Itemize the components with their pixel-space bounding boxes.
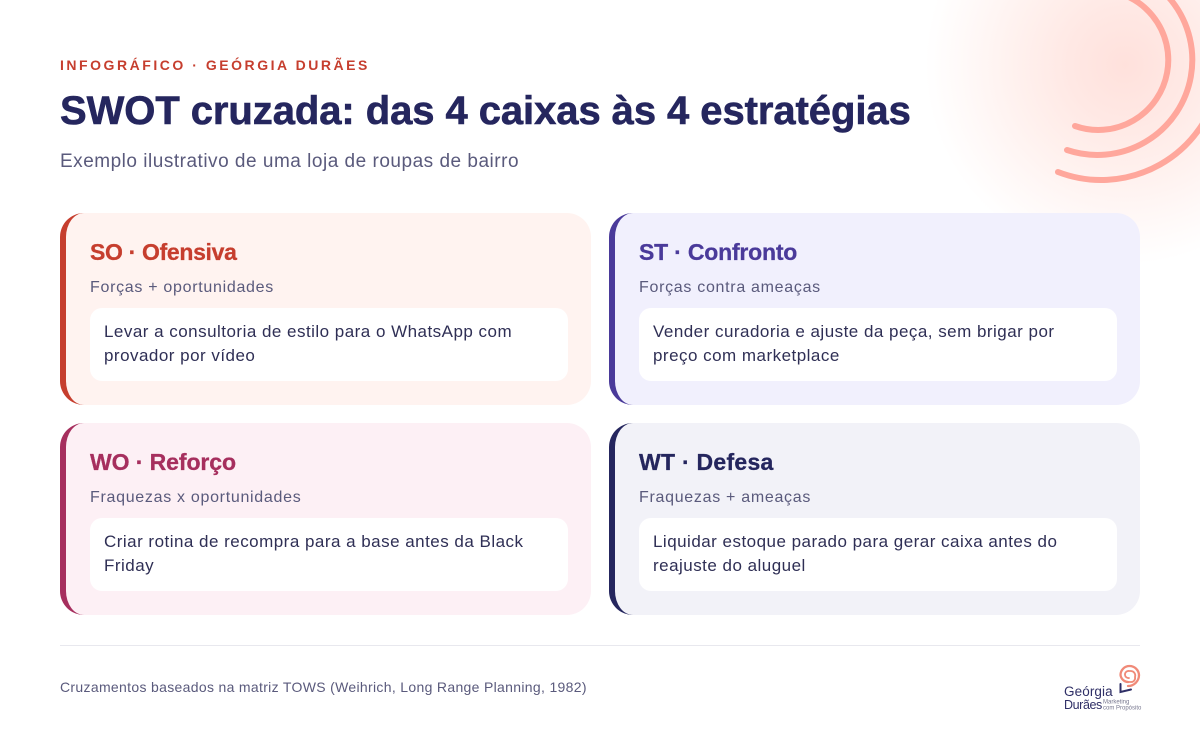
strategy box: ST: preço com marketplace: [653, 346, 840, 365]
strategy box: ST: Vender curadoria e ajuste da peça, sem brigar por: [653, 322, 1055, 341]
strategy box: WO: Friday: [104, 556, 154, 575]
source note: Cruzamentos baseados na matriz TOWS (Weihrich, Long Range Planning, 1982): [60, 679, 587, 695]
strategy box: WT: reajuste do aluguel: [653, 556, 806, 575]
title: SWOT cruzada: das 4 caixas às 4 estratégias: [60, 89, 911, 133]
eyebrow: INFOGRÁFICO · GEÓRGIA DURÃES: [60, 57, 370, 73]
panel: WO Reforço: [60, 423, 591, 615]
heading: WO: WO · Reforço: [90, 449, 236, 475]
subtitle: Exemplo ilustrativo de uma loja de roupas de bairro: [60, 151, 519, 172]
strategy box: ST: [639, 308, 1117, 381]
decorative corner glow: [900, 0, 1200, 290]
strategy box: WT: [639, 518, 1117, 591]
strategy box: WO: Criar rotina de recompra para a base antes da Black: [104, 532, 523, 551]
strategy box: WT: Liquidar estoque parado para gerar caixa antes do: [653, 532, 1057, 551]
heading: WT: WT · Defesa: [639, 449, 774, 475]
strategy box: SO: Levar a consultoria de estilo para o WhatsApp com: [104, 322, 512, 341]
subheading: ST: Forças contra ameaças: [639, 278, 821, 296]
logo: Geórgia Durães: Durães: [1064, 698, 1102, 712]
logo mark: [1120, 666, 1139, 692]
heading: ST: ST · Confronto: [639, 239, 797, 265]
strategy box: WO: [90, 518, 568, 591]
subheading: WT: Fraquezas + ameaças: [639, 488, 811, 506]
strategy box: SO: [90, 308, 568, 381]
logo: Geórgia Durães: Marketing: [1103, 700, 1129, 706]
strategy box: SO: provador por vídeo: [104, 346, 255, 365]
logo wordmark: Geórgia: [1064, 684, 1113, 699]
subheading: WO: Fraquezas x oportunidades: [90, 488, 301, 506]
panel: ST Confronto: [609, 213, 1140, 405]
icon: concentric arcs: [1055, 0, 1200, 183]
logo: Geórgia Durães: [1064, 664, 1142, 712]
heading: SO: SO · Ofensiva: [90, 239, 237, 265]
panel: SO Ofensiva: [60, 213, 591, 405]
panel: WT Defesa: [609, 423, 1140, 615]
logo: Geórgia Durães: com Propósito: [1103, 706, 1142, 712]
subheading: SO: Forças + oportunidades: [90, 278, 274, 296]
